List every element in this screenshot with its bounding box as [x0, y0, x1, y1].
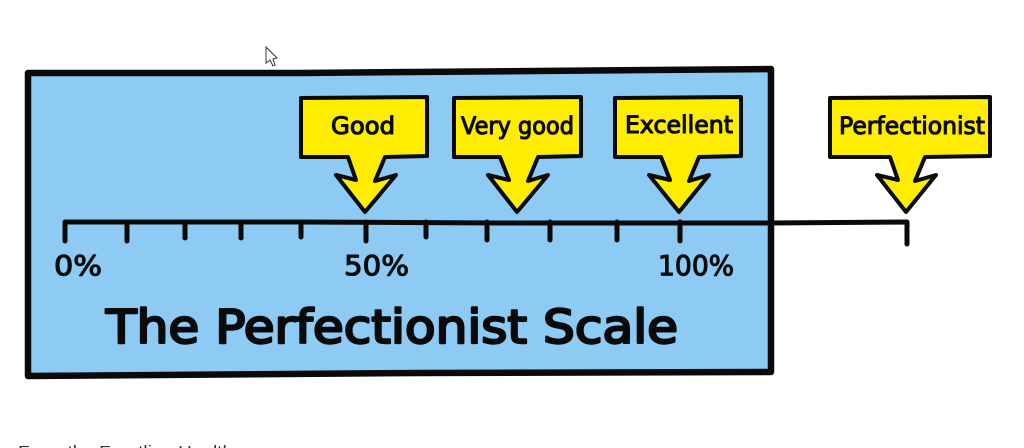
- label: 50%: 50%: [344, 249, 409, 282]
- callout: Good: Good: [331, 112, 395, 140]
- callout: Excellent: [615, 97, 741, 212]
- callout: Perfectionist: Perfectionist: [839, 112, 985, 140]
- callout: Good: [301, 97, 427, 212]
- title: The Perfectionist Scale: [105, 300, 678, 354]
- label: 100%: 100%: [658, 249, 734, 282]
- callout: Very good: Very good: [461, 112, 574, 140]
- scale axis with tick marks: [65, 222, 907, 244]
- callout: Perfectionist: [830, 97, 990, 212]
- panel: blue scale background: [28, 69, 771, 376]
- label: 0%: 0%: [54, 249, 102, 282]
- callout: Excellent: Excellent: [625, 111, 733, 139]
- icon: mouse cursor: [266, 47, 277, 66]
- callout: Very good: [454, 97, 581, 212]
